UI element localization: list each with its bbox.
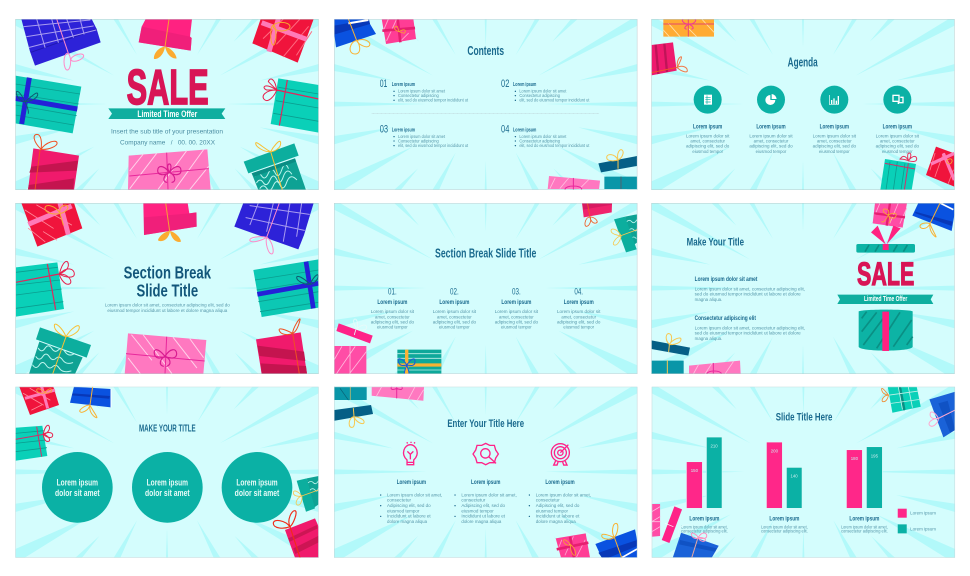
item 02: Consectetur adipiscing (519, 93, 560, 98)
gift: teal wavy side (611, 214, 637, 252)
icon: speech bubbles (893, 95, 903, 104)
section title: Section Break (124, 262, 211, 282)
text block 1 (695, 276, 805, 302)
group label 2: Lorem ipsum dolor sit amet, (761, 524, 808, 529)
gift: light pink (128, 149, 211, 190)
column 03: eiusmod tempor (501, 325, 532, 330)
circle 1: dolor sit amet (55, 488, 100, 498)
agenda item 1: amet, consectetur (690, 138, 725, 143)
item 02: Lorem ipsum (513, 82, 537, 88)
icon: lightbulb (404, 442, 417, 465)
circle 3: dolor sit amet (235, 488, 279, 498)
title: Make Your Title (687, 237, 744, 249)
item 04: 04 (501, 123, 509, 135)
bar chart: 140 (790, 474, 798, 479)
text block 2: sed do eiusmod tempor incididunt ut labore et dolore (695, 331, 801, 336)
column 04 (557, 286, 601, 330)
column 3: consectetur (536, 498, 560, 503)
column 02: amet, consectetur (437, 314, 472, 319)
group label 2: Lorem ipsum (769, 516, 799, 523)
agenda item 3 (813, 86, 857, 154)
agenda item 4: eiusmod tempor (882, 149, 913, 154)
column 01: 01. (388, 286, 397, 296)
gift: crimson striped (28, 134, 79, 190)
gift: dark teal opened (334, 387, 373, 427)
gift: teal plaid (882, 387, 921, 413)
bar chart (686, 437, 882, 508)
text block 1: Lorem ipsum dolor sit amet, consectetur adipiscing elit, (695, 287, 805, 292)
agenda item 2: adipiscing elit, sed do (749, 144, 793, 149)
agenda item 2: amet, consectetur (754, 138, 789, 143)
group label 3: Lorem ipsum dolor sit amet, (841, 524, 888, 529)
column 2: Incididunt ut labore et (461, 514, 506, 519)
gift: light pink (125, 333, 206, 374)
text block 2: Consectetur adipiscing elit (695, 315, 757, 322)
group label 1: Lorem ipsum dolor sit amet, (681, 524, 728, 529)
agenda item 3: amet, consectetur (817, 138, 852, 143)
icon: clipboard (704, 95, 712, 105)
column 03: Lorem ipsum (501, 299, 531, 306)
section subtitle: Lorem ipsum dolor sit amet, consectetur adipiscing elit, sed do (105, 303, 230, 308)
column 1: consectetur (387, 498, 411, 503)
section subtitle: eiusmod tempor incididunt ut labore et dolore magna aliqua (107, 308, 228, 313)
column 03: 03. (512, 286, 521, 296)
item 01 (380, 78, 469, 103)
gift: pink (382, 19, 416, 44)
column 1: Adipiscing elit, sed do (387, 503, 431, 508)
column 03 (495, 286, 539, 330)
agenda item 1: Lorem ipsum dolor sit (686, 133, 730, 138)
column 04: amet, consectetur (561, 314, 596, 319)
column 3: Lorem ipsum dolor sit amet, (536, 492, 591, 497)
item 02: 02 (501, 78, 509, 90)
column 02 (433, 286, 477, 330)
gift: blue (595, 523, 637, 558)
gift: teal bottom (880, 153, 917, 190)
agenda item 3: eiusmod tempor (819, 149, 850, 154)
column 04: Lorem ipsum (564, 299, 594, 306)
group label 1 (681, 516, 728, 534)
column 03: amet, consectetur (499, 314, 534, 319)
column 2: Adipiscing elit, sed do (461, 503, 505, 508)
gift: pink (873, 203, 907, 228)
column 02: Lorem ipsum dolor sit (433, 309, 477, 314)
gift: teal with blue ribbon (15, 76, 81, 133)
open gift box (859, 310, 913, 351)
column 02: adipiscing elit, sed do (433, 320, 476, 325)
agenda item 4 (876, 86, 920, 154)
agenda item 4: Lorem ipsum (883, 124, 912, 131)
gift: teal with red ribbon (263, 78, 319, 133)
legend (898, 509, 936, 533)
section subtitle (105, 303, 230, 313)
ribbon banner: Limited Time Offer (137, 109, 198, 119)
gift: pink (556, 533, 590, 558)
group label 3 (841, 516, 888, 534)
gift: blue (912, 203, 954, 237)
column 02: Lorem ipsum (439, 299, 469, 306)
group label 3: Lorem ipsum (849, 516, 879, 523)
item 03: 03 (380, 123, 388, 135)
gift: pink bar (336, 319, 373, 343)
gift: pink top center (139, 19, 192, 59)
column 1: Lorem ipsum dolor sit amet, (387, 492, 442, 497)
item 01: elit, sed do eiusmod tempor incididunt ut (398, 98, 469, 103)
gift: crimson (582, 203, 612, 226)
column 3: dolore magna aliqua (536, 519, 576, 524)
item 02: Lorem ipsum dolor sit amet (519, 89, 567, 94)
open gift lid with bow (856, 226, 915, 253)
column 03: Lorem ipsum dolor sit (495, 309, 539, 314)
sale heading: SALE (127, 60, 209, 115)
column 3: Incididunt ut labore et (536, 514, 580, 519)
agenda item 3: Lorem ipsum (820, 124, 849, 131)
column 3 (529, 479, 591, 524)
item 04 (501, 123, 590, 148)
slide 4: section break cover (15, 203, 319, 374)
column 2: eiusmod tempor (461, 508, 494, 513)
gift: crimson (651, 42, 687, 75)
column 2: Lorem ipsum dolor sit amet, (461, 492, 517, 497)
gift: teal striped (397, 350, 441, 374)
column 04: eiusmod tempor (563, 325, 594, 330)
column 2: consectetur (461, 498, 486, 503)
slide 1: sale cover (15, 19, 319, 190)
gift: pink box (334, 346, 366, 374)
column 01: Lorem ipsum dolor sit (371, 309, 415, 314)
gift: teal left (16, 261, 74, 317)
item 03: Lorem ipsum dolor sit amet (398, 134, 446, 139)
circle 2: dolor sit amet (145, 488, 190, 498)
gift: crimson (256, 319, 307, 374)
title: Enter Your Title Here (447, 418, 524, 430)
slide 2: contents (334, 19, 638, 190)
column 04: Lorem ipsum dolor sit (557, 309, 601, 314)
gifts: bottom left (652, 504, 719, 558)
item 01: Consectetur adipiscing (398, 93, 439, 98)
icon: target (551, 444, 569, 465)
item 01: 01 (380, 78, 387, 90)
sale heading: SALE (857, 255, 914, 292)
title: MAKE YOUR TITLE (139, 424, 196, 435)
company and date: Company name / 00. 00. 20XX (120, 140, 215, 146)
agenda item 2 (749, 86, 793, 154)
legend: Lorem ipsum (910, 511, 936, 516)
gift: light pink bottom (689, 361, 741, 374)
column 2: Lorem ipsum (471, 479, 500, 486)
item 02 (501, 78, 590, 103)
gift: teal wavy (29, 324, 91, 374)
gift: light pink bottom (548, 176, 600, 189)
gift: red striped (252, 19, 314, 63)
column 01: eiusmod tempor (377, 325, 408, 330)
item 02: elit, sed do eiusmod tempor incididunt ut (519, 98, 590, 103)
column 3: eiusmod tempor (536, 508, 568, 513)
agenda item 3: adipiscing elit, sed do (813, 144, 856, 149)
item 04: Lorem ipsum (513, 127, 537, 133)
circle 1 (42, 452, 113, 523)
column 1 (380, 479, 442, 524)
column 01: Lorem ipsum (377, 299, 407, 306)
item 01: Lorem ipsum dolor sit amet (398, 89, 446, 94)
gift: teal wavy side (293, 476, 319, 512)
text block 1: sed do eiusmod tempor incididunt ut labore et dolore (695, 292, 801, 297)
circle 3 (222, 452, 292, 523)
agenda item 4: amet, consectetur (880, 138, 915, 143)
agenda item 1 (686, 86, 730, 154)
column 3: Adipiscing elit, sed do (536, 503, 580, 508)
item 03: Lorem ipsum (392, 127, 415, 133)
gift: blue speckled (929, 392, 955, 437)
agenda item 2: Lorem ipsum (756, 124, 786, 131)
subtitle: Insert the sub title of your presentation (111, 130, 223, 136)
circle 3: Lorem ipsum (236, 477, 278, 487)
gift: teal wavy (244, 141, 306, 190)
text block 2 (695, 315, 805, 341)
column 3: Lorem ipsum (545, 479, 575, 486)
text block 1: magna aliqua. (695, 297, 722, 302)
column 1: eiusmod tempor (387, 508, 420, 513)
column 02: eiusmod tempor (439, 325, 470, 330)
legend: Lorem ipsum (910, 527, 936, 532)
section title (124, 262, 211, 300)
item 03: Consectetur adipiscing (398, 138, 439, 143)
column 2 (454, 479, 517, 524)
slide 5: section break with four columns (334, 203, 638, 374)
group label 2 (761, 516, 808, 534)
group label 1: consectetur adipiscing elit. (681, 529, 728, 534)
section title: Slide Title (136, 280, 198, 300)
slide 6: make your title with open gift (651, 203, 955, 374)
bar chart: 195 (871, 453, 879, 458)
agenda item 3: Lorem ipsum dolor sit (813, 133, 857, 138)
gift: red (926, 147, 954, 187)
gift: blue (334, 19, 376, 54)
circle 1: Lorem ipsum (57, 477, 98, 487)
contents title: Contents (467, 43, 504, 58)
agenda item 2: Lorem ipsum dolor sit (749, 133, 793, 138)
gift: teal right (253, 259, 319, 317)
bar chart: 200 (771, 448, 779, 453)
agenda item 1: Lorem ipsum (693, 124, 722, 131)
agenda item 1: adipiscing elit, sed do (686, 144, 730, 149)
slide 7: three circles (15, 386, 319, 558)
bar chart: 150 (691, 468, 699, 473)
column 01: amet, consectetur (375, 314, 410, 319)
agenda title: Agenda (788, 55, 818, 70)
gift: crimson (273, 511, 319, 558)
gift: blue (70, 387, 111, 418)
column 02: 02. (450, 286, 459, 296)
bar chart: 180 (851, 456, 859, 461)
item 04: Lorem ipsum dolor sit amet (519, 134, 567, 139)
column 01: adipiscing elit, sed do (371, 320, 414, 325)
agenda item 2: eiusmod tempor (756, 149, 787, 154)
slide 3: agenda (651, 19, 955, 190)
gift: light pink top (372, 387, 424, 401)
gift: yellow (663, 19, 714, 37)
circle 2: Lorem ipsum (147, 477, 188, 487)
text block 2: Lorem ipsum dolor sit amet, consectetur adipiscing elit, (695, 325, 805, 330)
ribbon banner: Limited Time Offer (864, 296, 908, 303)
title: Slide Title Here (776, 411, 832, 423)
agenda item 4: adipiscing elit, sed do (876, 144, 919, 149)
ribbon banner (108, 108, 225, 119)
group label 3: consectetur adipiscing elit. (841, 529, 888, 534)
column 1: dolore magna aliqua (387, 519, 427, 524)
text block 1: Lorem ipsum dolor sit amet (695, 276, 758, 283)
gift: red (19, 387, 59, 415)
column 04: adipiscing elit, sed do (557, 320, 601, 325)
column 1: Lorem ipsum (397, 479, 426, 486)
item 03: elit, sed do eiusmod tempor incididunt ut (398, 143, 469, 148)
item 03 (380, 123, 469, 148)
icon: badge with magnifier (473, 443, 498, 465)
group label 1: Lorem ipsum (689, 516, 719, 523)
agenda item 1: eiusmod tempor (692, 149, 723, 154)
slide 9: bar chart (652, 386, 956, 558)
icon: bar chart (829, 95, 839, 105)
gift: pink top (143, 203, 197, 242)
gift: teal (15, 425, 53, 461)
section title: Section Break Slide Title (435, 246, 536, 260)
circle 2 (132, 452, 203, 523)
ribbon banner (837, 295, 933, 304)
slide 8: three icons (334, 386, 638, 558)
column 04: 04. (574, 286, 583, 296)
bar chart: 210 (710, 443, 718, 448)
text block 2: magna aliqua. (695, 336, 722, 341)
group label 2: consectetur adipiscing elit. (761, 529, 808, 534)
item 04: Consectetur adipiscing (519, 138, 560, 143)
item 01: Lorem ipsum (392, 82, 415, 88)
item 04: elit, sed do eiusmod tempor incididunt ut (519, 143, 590, 148)
agenda item 4: Lorem ipsum dolor sit (876, 133, 920, 138)
column 2: dolore magna aliqua (461, 519, 502, 524)
gift: dark teal opened (651, 334, 690, 374)
gift: dark teal opened (598, 150, 637, 189)
gift: blue plaid (21, 19, 101, 70)
column 1: Incididunt ut labore et (387, 514, 431, 519)
icon: pie chart (765, 94, 777, 105)
gift: blue plaid (234, 203, 314, 254)
column 01 (371, 286, 415, 330)
column 03: adipiscing elit, sed do (495, 320, 538, 325)
gift: red (21, 203, 82, 247)
